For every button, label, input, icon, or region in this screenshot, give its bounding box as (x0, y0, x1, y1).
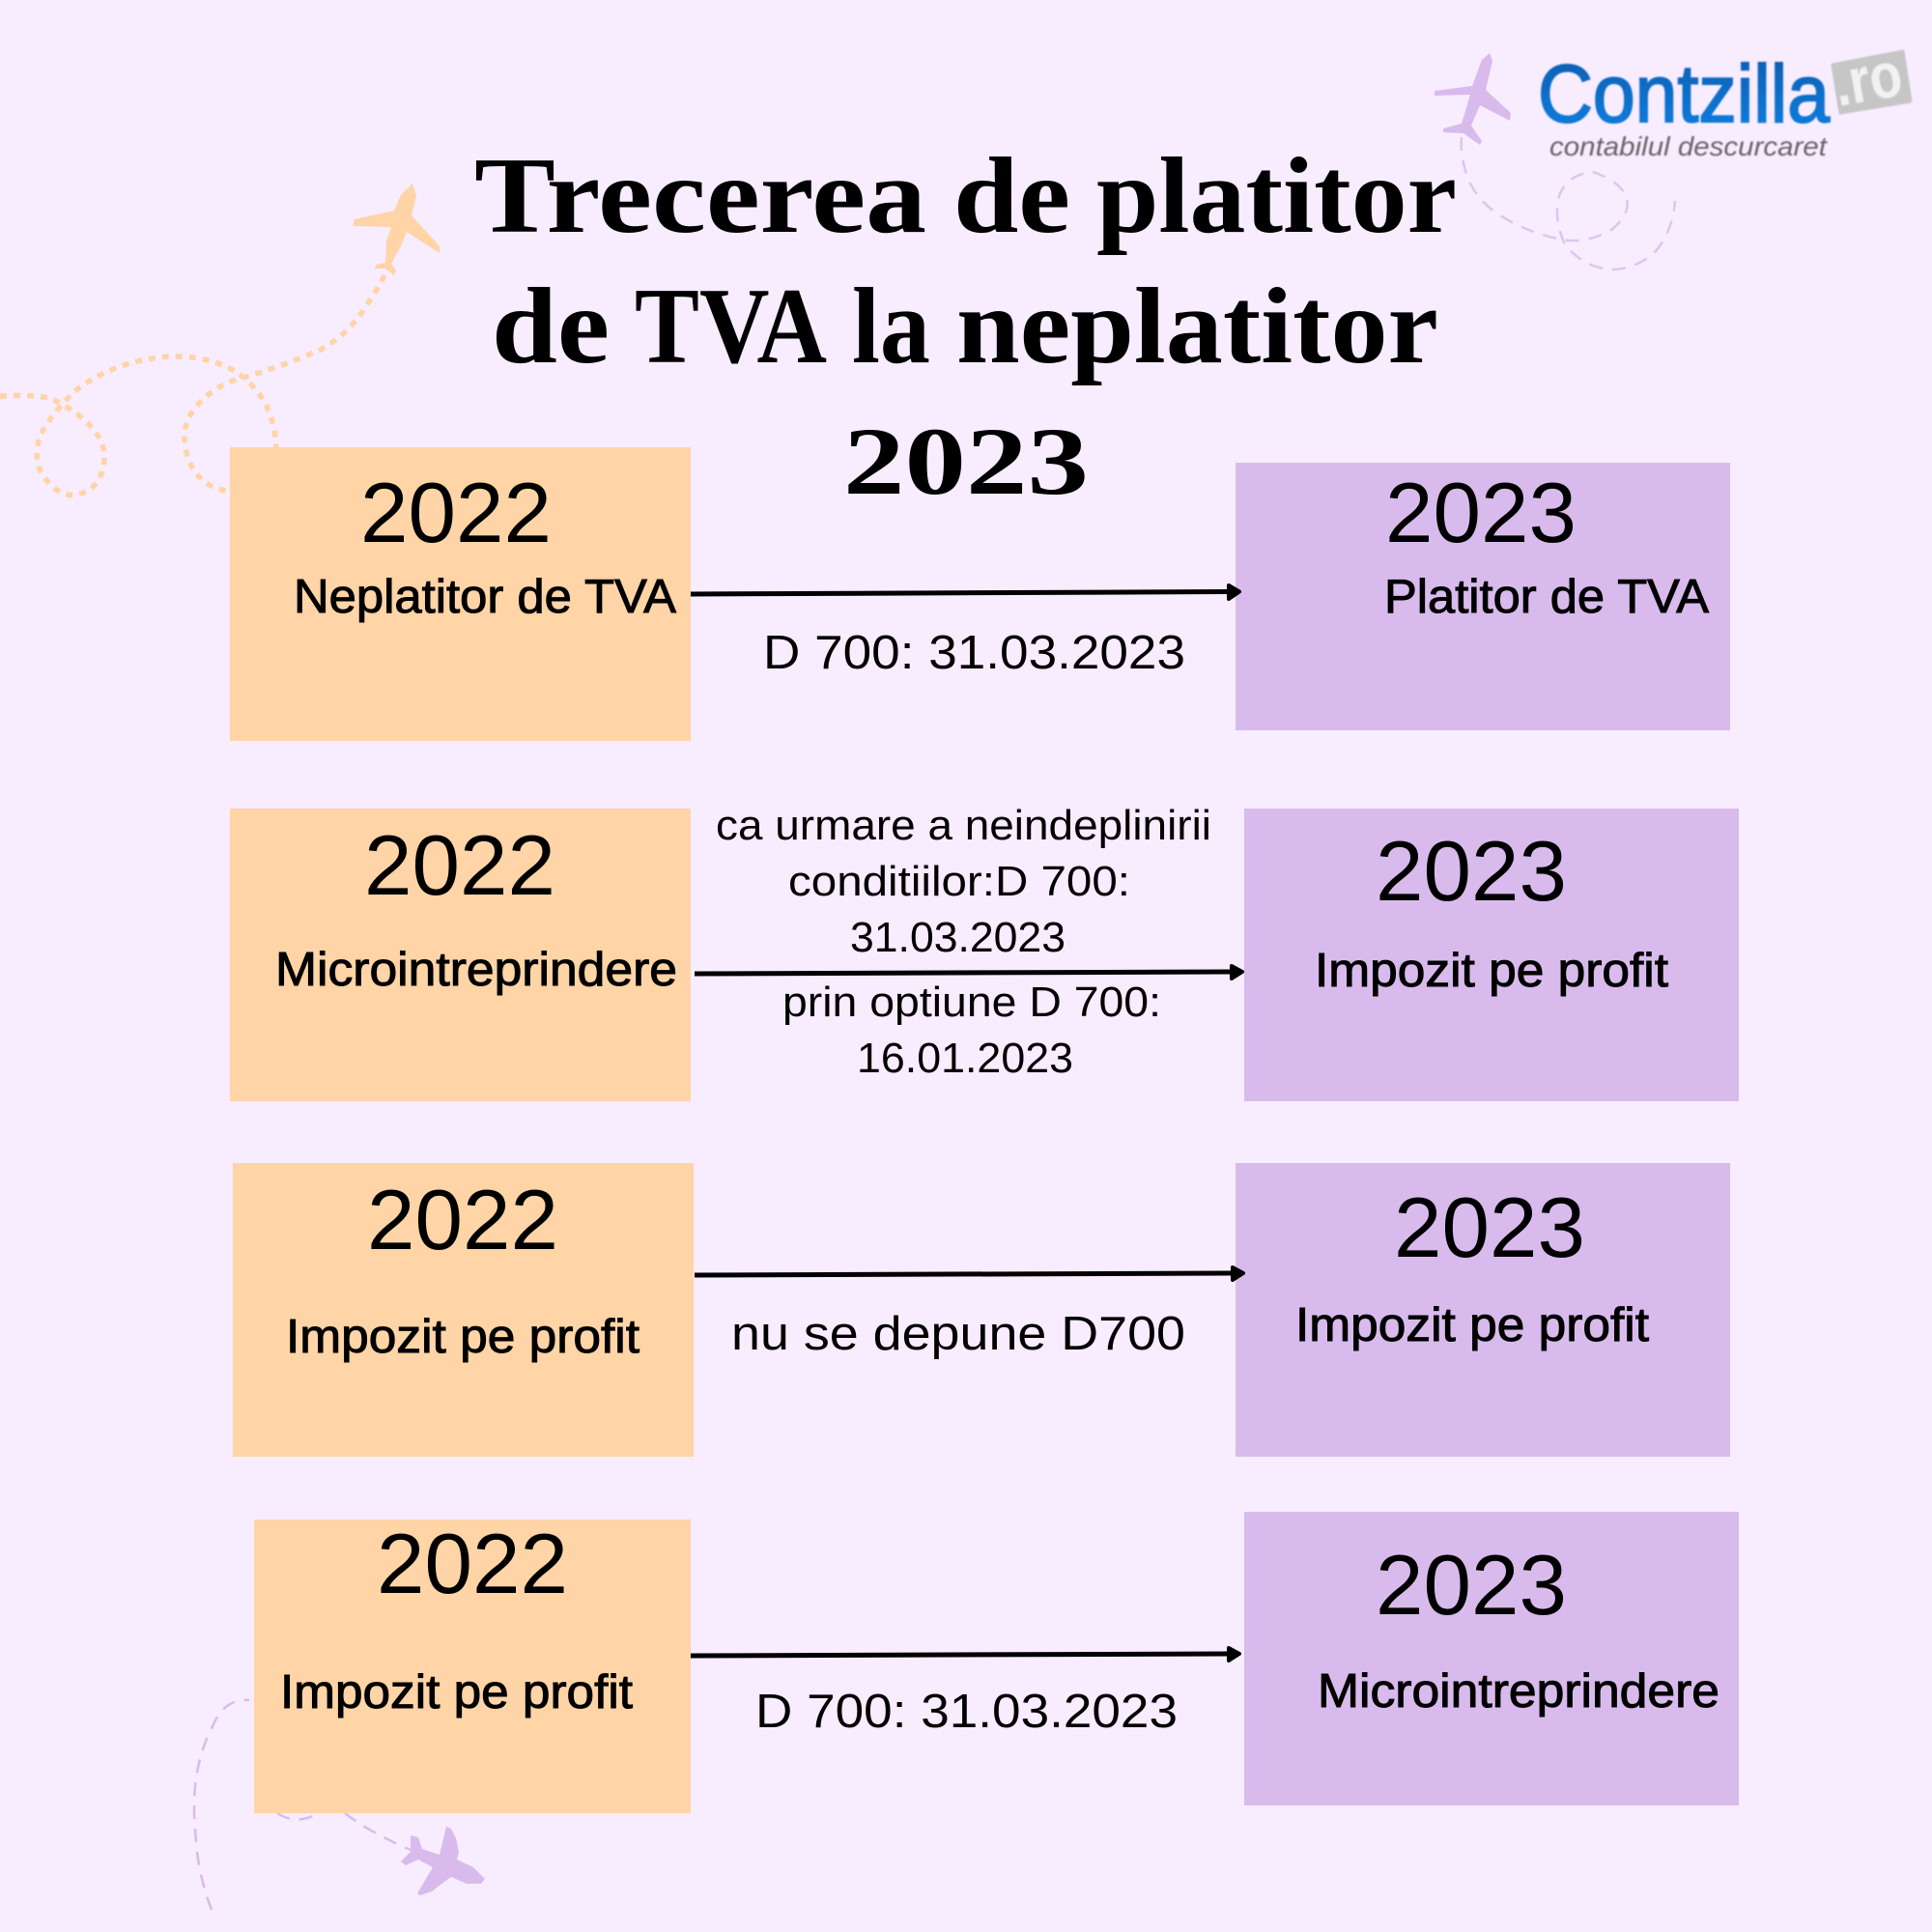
year 2022: 2022 (377, 1516, 568, 1611)
logo .ro tag: .ro (1829, 38, 1907, 120)
status label: Impozit pe profit (280, 1666, 633, 1719)
note row 3: nu se depune D700 (731, 1308, 1185, 1360)
arrow: row 3 (695, 1267, 1243, 1280)
title: 2023 (843, 408, 1089, 515)
panel: row 3 to 2023 (1236, 1163, 1730, 1457)
deadline note row 4: D 700: 31.03.2023 (755, 1686, 1178, 1738)
title: Trecerea (474, 136, 926, 256)
panel: row 1 from 2022 (230, 447, 691, 741)
status label: Impozit pe profit (286, 1311, 639, 1363)
conditions note row 2: 31.03.2023 (850, 914, 1065, 961)
icon: purple airplane top (1435, 53, 1511, 145)
purple dashed flight path bottom (194, 1700, 411, 1910)
year 2023: 2023 (1376, 823, 1567, 919)
panel: row 2 from 2022 (230, 809, 691, 1101)
arrow: row 2 (695, 966, 1242, 979)
conditions note row 2: ca urmare a neindeplinirii (716, 802, 1211, 849)
panel: row 4 to 2023 (1244, 1512, 1739, 1805)
status label: Microintreprindere (1318, 1665, 1719, 1718)
arrow: row 1 (691, 585, 1239, 599)
panel: row 3 from 2022 (233, 1163, 694, 1457)
year 2023: 2023 (1376, 1537, 1567, 1633)
title: de (492, 267, 610, 386)
title: de (953, 136, 1070, 256)
conditions note row 2: 16.01.2023 (857, 1035, 1073, 1082)
panel: row 4 from 2022 (254, 1516, 691, 1813)
year 2023: 2023 (1385, 465, 1577, 560)
logo: Contzilla.ro (1538, 38, 1911, 161)
orange dashed flight path (0, 273, 385, 496)
year 2022: 2022 (364, 817, 555, 913)
status label: Neplatitor de TVA (294, 571, 676, 623)
status label: Microintreprindere (275, 944, 677, 996)
panel: row 2 to 2023 (1244, 809, 1739, 1101)
status label: Impozit pe profit (1295, 1299, 1649, 1351)
conditions note row 2: prin optiune D 700: (782, 979, 1161, 1026)
deadline note row 1: D 700: 31.03.2023 (763, 627, 1185, 679)
title: neplatitor (956, 267, 1438, 386)
purple dashed flight path top (1462, 137, 1675, 270)
logo tagline: contabilul descurcaret (1549, 131, 1828, 161)
title: platitor (1096, 136, 1457, 256)
year 2023: 2023 (1394, 1179, 1585, 1275)
icon: orange airplane (353, 184, 440, 275)
title: la (852, 267, 930, 386)
conditions note row 2: conditiilor:D 700: (788, 858, 1130, 905)
conditions note row 2 (716, 802, 1211, 1082)
panel: row 1 to 2023 (1236, 463, 1730, 730)
logo wordmark: Contzilla (1538, 48, 1830, 139)
title: TVA (635, 267, 827, 386)
arrow: row 4 (691, 1648, 1239, 1661)
icon: purple airplane bottom (401, 1827, 485, 1895)
status label: Platitor de TVA (1384, 571, 1709, 623)
year 2022: 2022 (367, 1172, 558, 1267)
status label: Impozit pe profit (1315, 945, 1668, 997)
title (474, 136, 1457, 515)
year 2022: 2022 (360, 465, 552, 560)
